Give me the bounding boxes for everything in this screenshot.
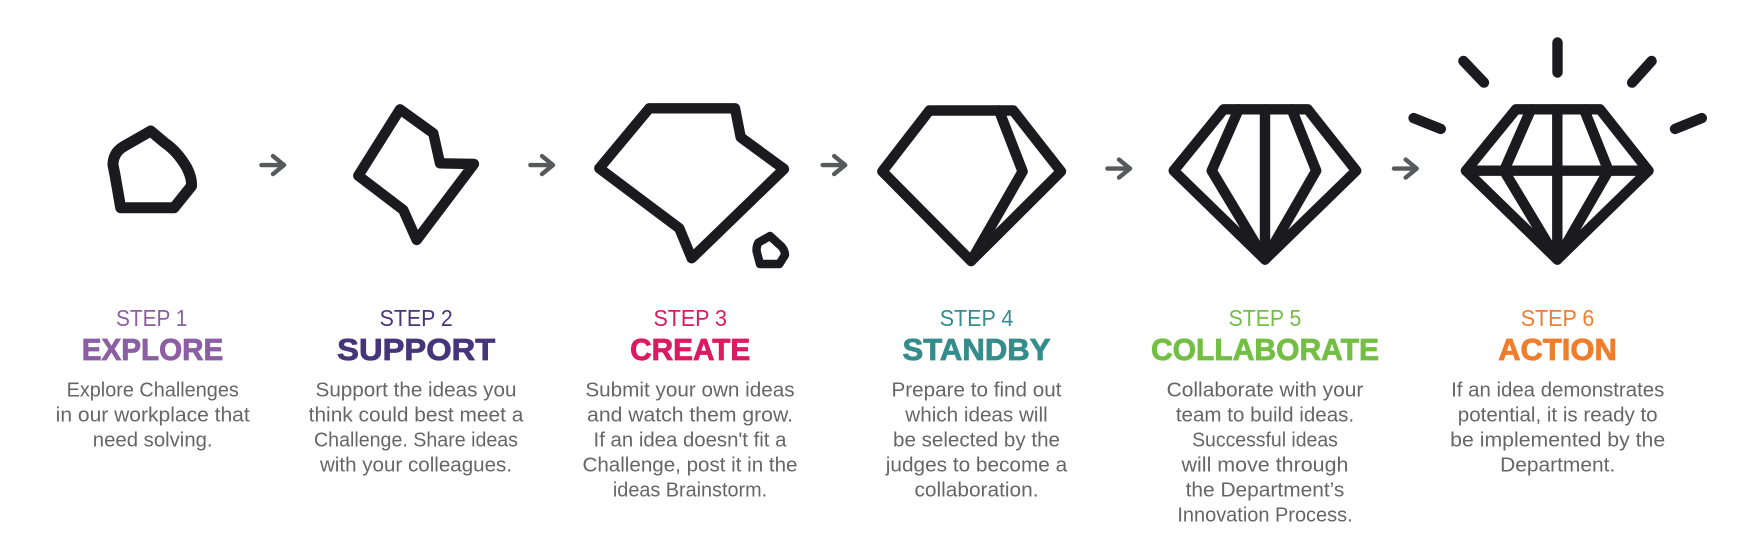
text block: support description: Challenge. Share ideas: [314, 429, 518, 452]
text block: create description: and watch them grow.: [587, 404, 793, 427]
arrow: step 3 to 4: [823, 156, 845, 174]
text block: create description: If an idea doesn't fit a: [594, 429, 787, 452]
icon: larger cut stone: [599, 108, 784, 258]
panel: step 4 standby: [882, 110, 1068, 502]
text block: collaborate description: will move through: [1181, 454, 1348, 477]
label: step 5: STEP 5: [1229, 305, 1301, 331]
text block: create description: Challenge, post it in the: [582, 454, 798, 477]
text block: create description: Submit your own ideas: [585, 379, 795, 402]
panel: step 2 support: [309, 109, 524, 477]
heading: support: SUPPORT: [337, 332, 495, 367]
heading: standby: STANDBY: [902, 332, 1051, 367]
text block: support description: [309, 379, 524, 477]
label: step 2: STEP 2: [380, 305, 453, 331]
panel: step 1 explore: [56, 131, 250, 452]
label: step 1: STEP 1: [116, 305, 187, 331]
text block: collaborate description: Innovation Process.: [1177, 504, 1353, 527]
heading: explore: EXPLORE: [82, 332, 223, 367]
text block: create description: [582, 379, 798, 502]
text block: action description: potential, it is ready to: [1458, 404, 1658, 427]
icon: gem with several facets: [1174, 109, 1356, 260]
label: step 4: STEP 4: [940, 305, 1013, 331]
text block: standby description: collaboration.: [914, 479, 1038, 502]
text block: create description: ideas Brainstorm.: [613, 479, 767, 502]
text block: explore description: need solving.: [93, 429, 213, 452]
heading: create: CREATE: [630, 332, 750, 367]
arrow: step 2 to 3: [530, 156, 553, 174]
icon: finished sparkling gem: [1414, 42, 1702, 260]
text block: action description: If an idea demonstrates: [1451, 379, 1664, 402]
icon: small stone: [757, 236, 785, 264]
heading: collaborate: COLLABORATE: [1151, 332, 1379, 367]
text block: collaborate description: team to build ideas.: [1176, 404, 1354, 427]
text block: support description: think could best meet a: [309, 404, 524, 427]
text block: standby description: Prepare to find out: [892, 379, 1062, 402]
text block: action description: [1450, 379, 1665, 477]
text block: collaborate description: Collaborate with your: [1167, 379, 1363, 402]
icon: rough stone: [113, 131, 192, 208]
text block: explore description: Explore Challenges: [67, 379, 239, 402]
text block: action description: Department.: [1500, 454, 1615, 477]
text block: support description: Support the ideas you: [316, 379, 516, 402]
text block: explore description: [56, 379, 250, 452]
arrow: step 4 to 5: [1107, 160, 1130, 178]
text block: collaborate description: the Department’s: [1186, 479, 1344, 502]
text block: standby description: be selected by the: [893, 429, 1060, 452]
panel: step 3 create: [582, 108, 798, 502]
arrow: step 5 to 6: [1394, 160, 1417, 178]
text block: action description: be implemented by the: [1450, 429, 1665, 452]
icon: gem with one facet: [882, 110, 1061, 261]
label: step 3: STEP 3: [653, 305, 727, 331]
text block: standby description: judges to become a: [885, 454, 1068, 477]
label: step 6: STEP 6: [1521, 305, 1594, 331]
text block: standby description: [885, 379, 1068, 502]
text block: collaborate description: Successful ideas: [1192, 429, 1338, 452]
text block: standby description: which ideas will: [904, 404, 1048, 427]
panel: step 5 collaborate: [1151, 109, 1379, 527]
icon: partly cut stone: [358, 109, 474, 240]
text block: explore description: in our workplace that: [56, 404, 250, 427]
text block: collaborate description: [1167, 379, 1363, 527]
text block: support description: with your colleagues.: [319, 454, 512, 477]
heading: action: ACTION: [1498, 332, 1617, 367]
arrow: step 1 to 2: [261, 156, 284, 174]
panel: step 6 action: [1414, 42, 1702, 477]
